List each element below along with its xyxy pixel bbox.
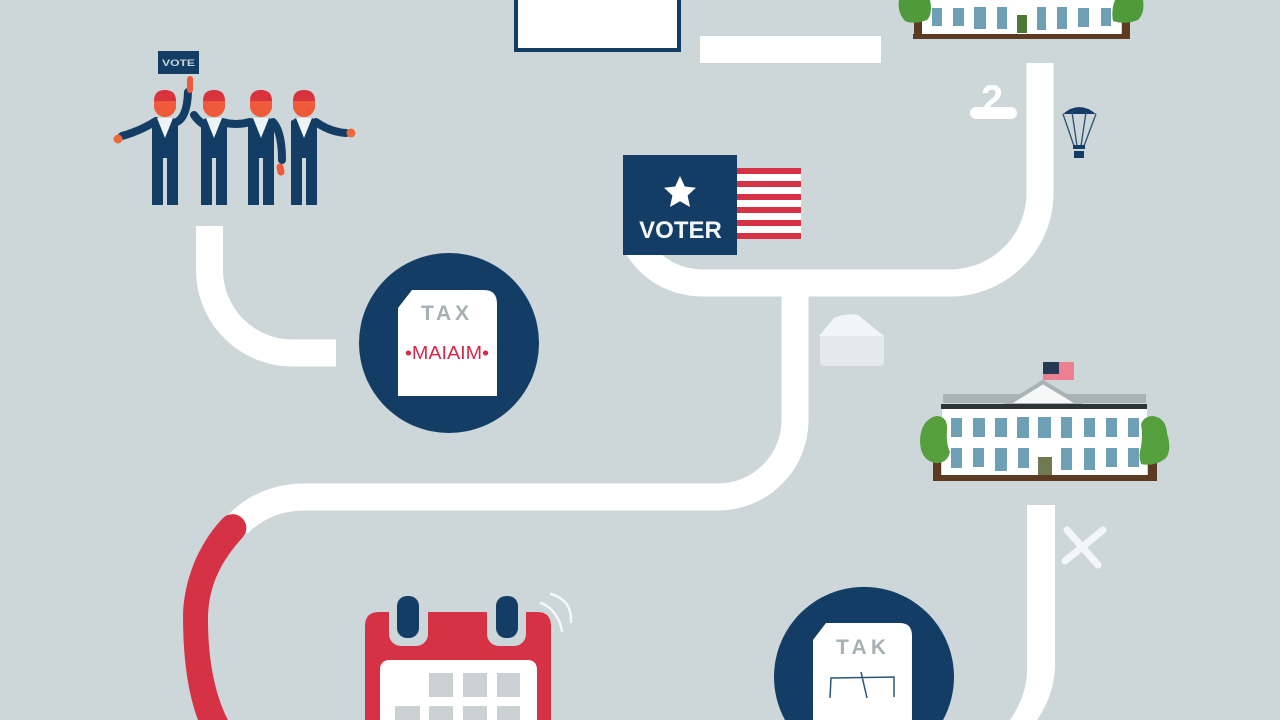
date panel: [380, 660, 537, 720]
top document box: [516, 0, 679, 50]
left tree: [920, 416, 950, 463]
ground line: [933, 475, 1157, 481]
icon: White House: [920, 362, 1169, 481]
path segment: red progress arc: [183, 514, 246, 720]
door: [1017, 15, 1027, 33]
person 4: [291, 90, 317, 205]
sign: [158, 51, 199, 74]
pediment: [1006, 382, 1081, 405]
tax circle icon: [359, 253, 539, 433]
flag: [1043, 362, 1074, 380]
person 1: [152, 90, 178, 205]
tax document: [813, 623, 912, 720]
sign: VOTE: [162, 58, 195, 68]
trunks: [914, 18, 922, 38]
tax document: [398, 290, 497, 396]
path segment: voter branch to timeline: [238, 296, 795, 524]
roof band: [943, 394, 1146, 403]
badge panel: [623, 155, 737, 255]
icon: number 2 mark: 2: [981, 78, 1003, 122]
door: [1038, 457, 1052, 475]
star: [664, 176, 696, 207]
path segment: protesters to tax circle: [210, 226, 336, 353]
icon: envelope: [819, 314, 884, 366]
icon: top White House cropped: [899, 0, 1143, 39]
person 2: [201, 90, 227, 205]
icon: hot air balloon: [1063, 107, 1096, 158]
windows: [932, 7, 1111, 30]
document red text: •MAIAIM•: [405, 343, 489, 363]
binding rings: [397, 596, 419, 638]
calendar body: [365, 612, 551, 720]
right tree: [1140, 416, 1169, 465]
document heading: TAK: [836, 636, 886, 659]
trunks: [933, 458, 941, 480]
flag stripes: [737, 168, 801, 239]
path segment: lower right route: [1010, 505, 1055, 720]
voter label: VOTER: [639, 217, 722, 244]
path segment: voter badge to top building: [636, 63, 1040, 283]
icon: X mark: [1065, 530, 1103, 565]
building body: [942, 409, 1147, 475]
right tree: [1112, 0, 1143, 23]
date cells: [395, 673, 520, 720]
lower tax circle icon: [774, 587, 954, 720]
alert arcs: [541, 594, 571, 631]
windows: [951, 417, 1139, 471]
icon: group of protesters with sign: [114, 51, 356, 205]
voter badge with flag: [623, 155, 801, 255]
ground line: [913, 34, 1130, 39]
handwritten mark: [830, 672, 894, 698]
raised and outstretched arms: [114, 79, 356, 172]
building body: [922, 0, 1121, 34]
icon: calendar: [365, 594, 571, 720]
icon: number 2 mark: [970, 78, 1017, 122]
person 3: [248, 90, 274, 205]
binding notches: [389, 600, 428, 646]
document heading: TAX: [421, 302, 469, 325]
left tree: [899, 0, 931, 23]
cornice: [941, 404, 1147, 409]
top white bar: [700, 36, 881, 63]
